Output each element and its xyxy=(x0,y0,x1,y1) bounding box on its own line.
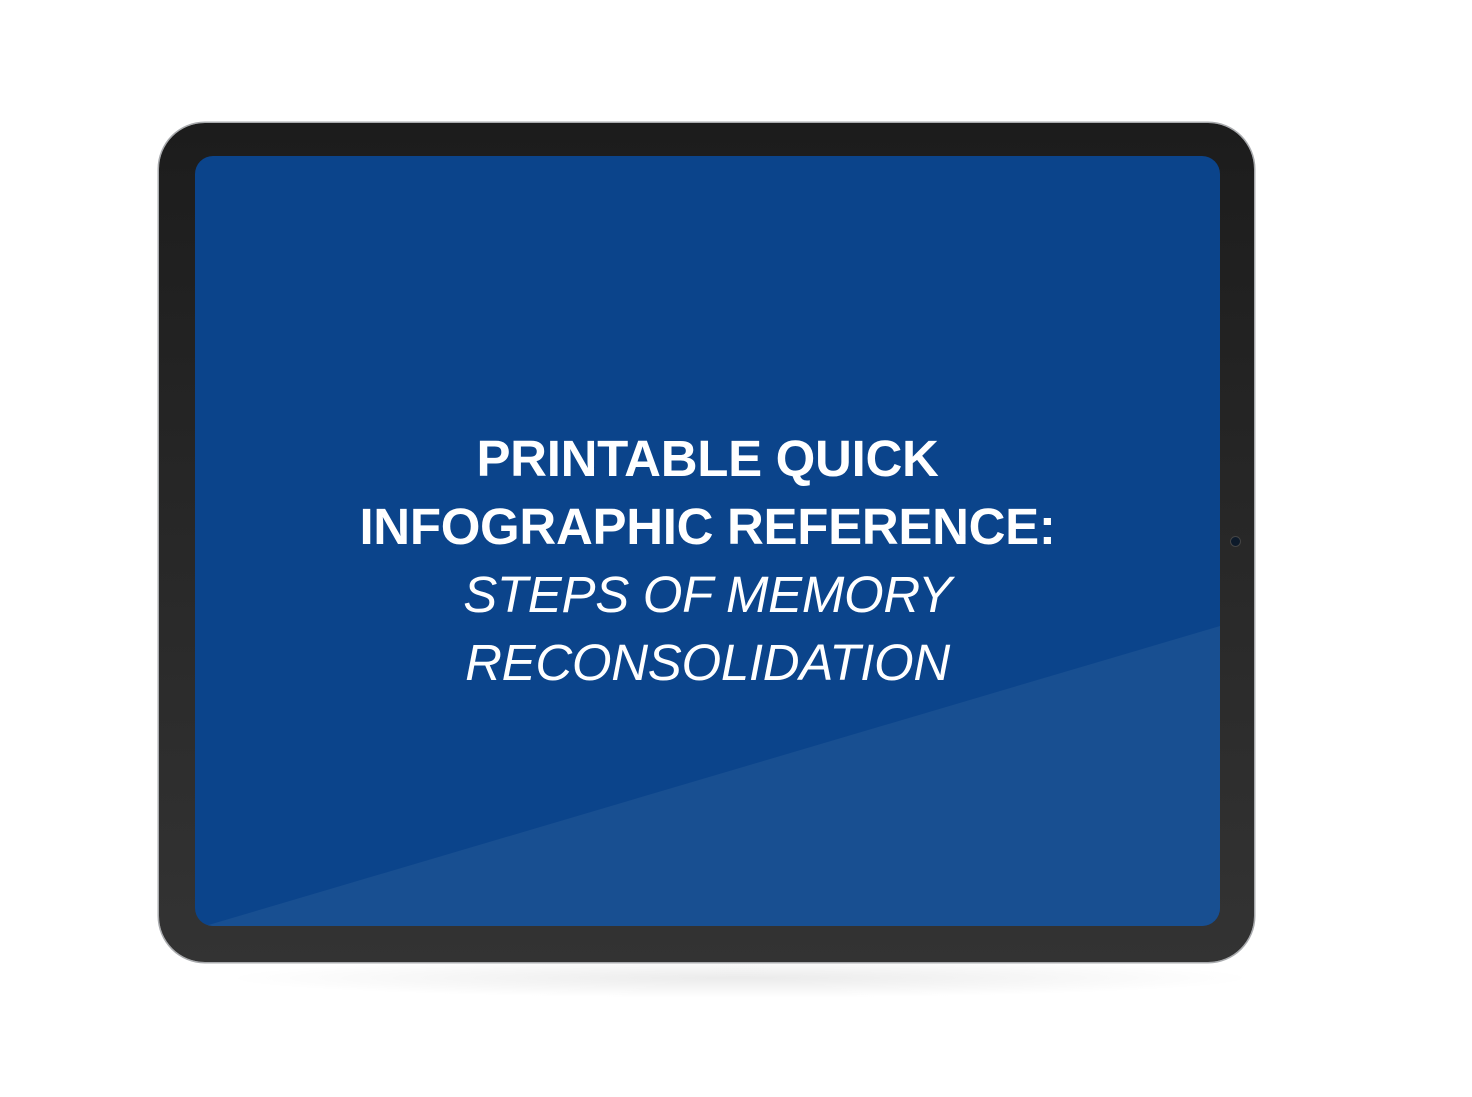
title: STEPS OF MEMORY xyxy=(463,566,952,623)
shadow under tablet xyxy=(220,958,1260,998)
screen highlight xyxy=(208,626,1220,926)
icon: camera xyxy=(1230,536,1241,547)
title: RECONSOLIDATION xyxy=(465,634,950,691)
title: PRINTABLE QUICK xyxy=(476,430,939,487)
title xyxy=(359,430,1056,691)
title: INFOGRAPHIC REFERENCE: xyxy=(359,498,1056,555)
screen xyxy=(195,156,1220,926)
tablet device xyxy=(159,123,1254,962)
